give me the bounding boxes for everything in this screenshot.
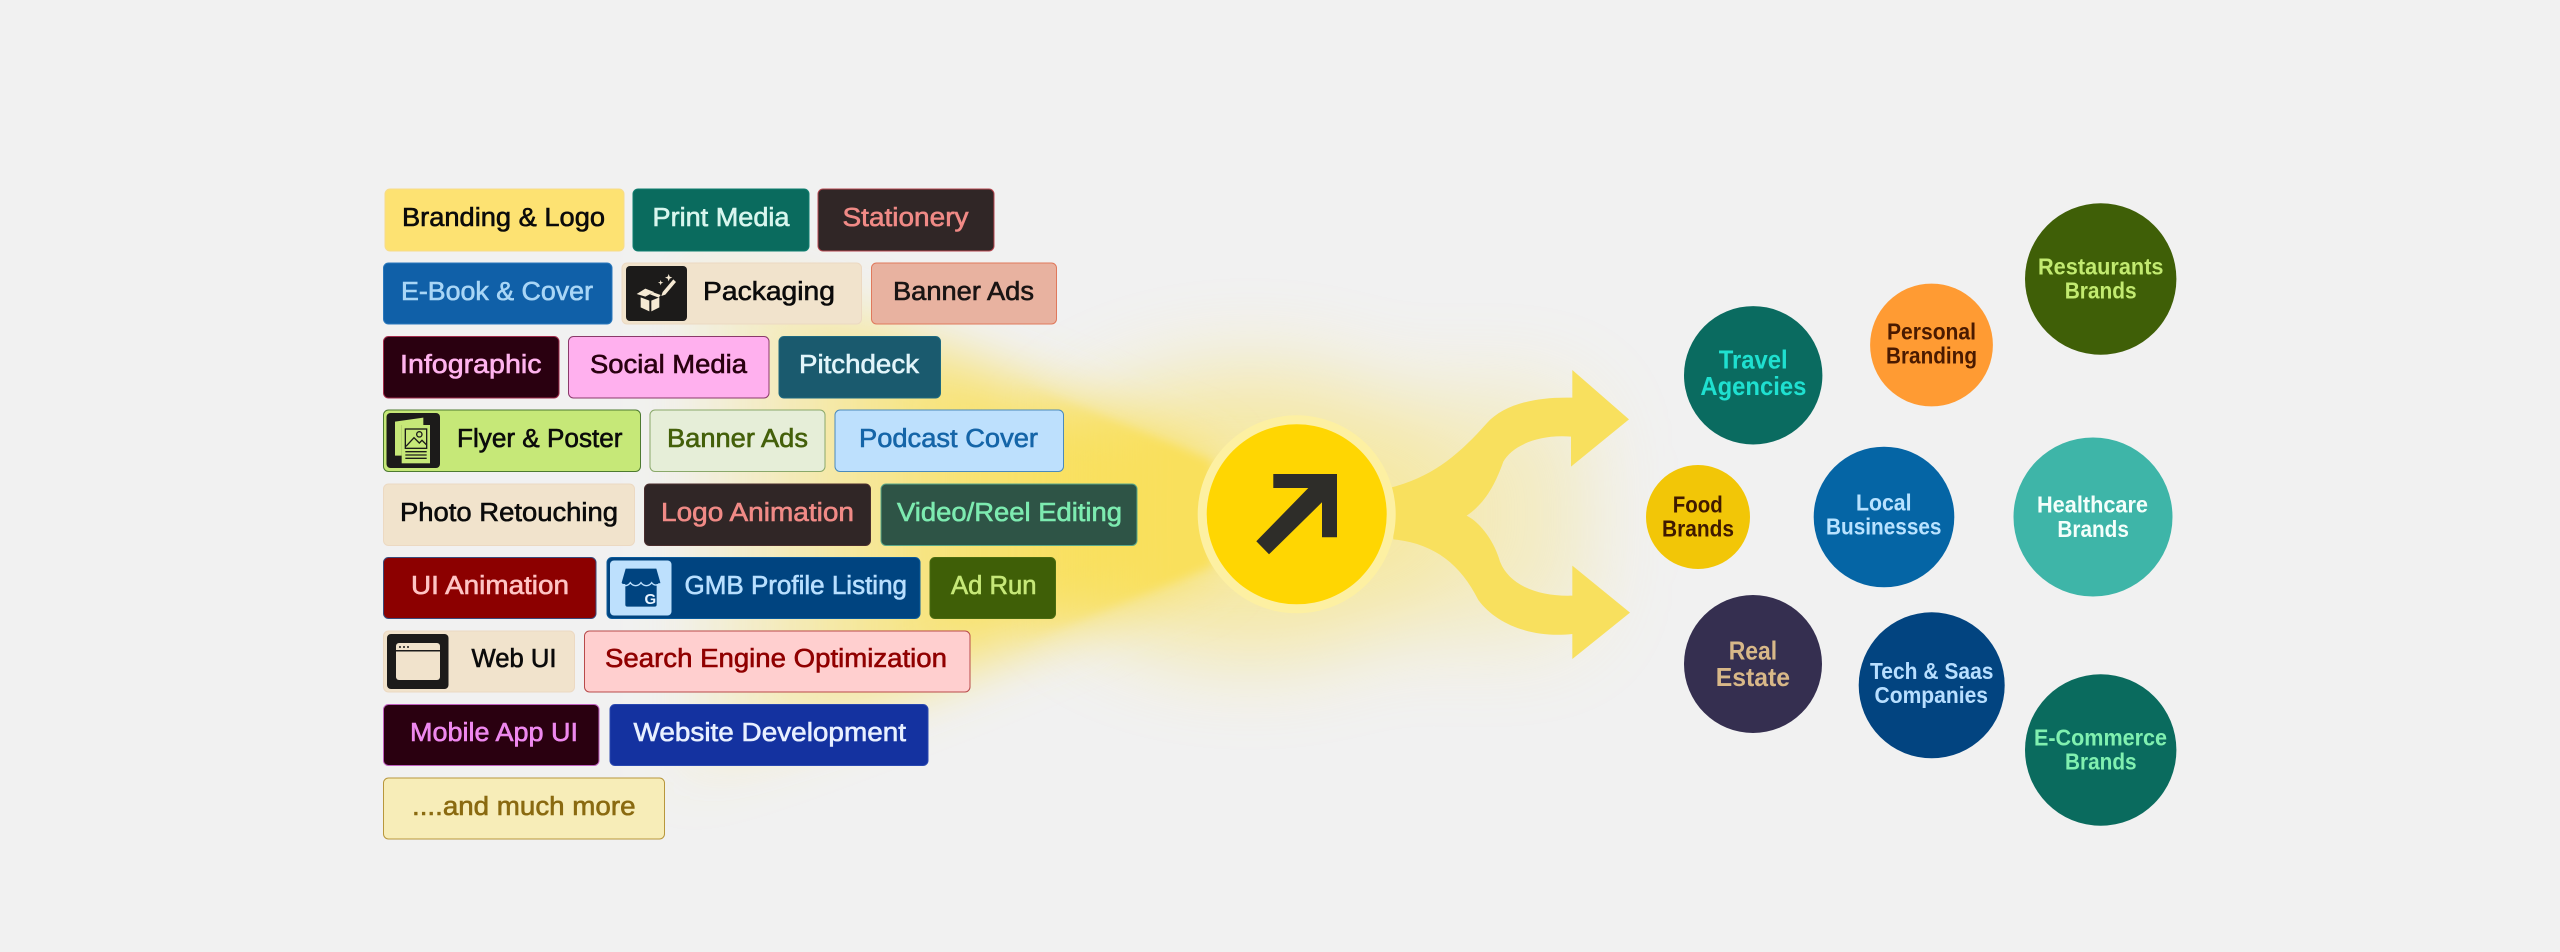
tag: Infographic: Infographic: [400, 351, 542, 379]
tag: Video/Reel Editing: [881, 484, 1137, 546]
bubble: Food Brands: Brands: [1662, 516, 1734, 542]
icon: storefront: [610, 560, 672, 616]
bubble: Food Brands: Food: [1673, 492, 1723, 518]
tag: Podcast Cover: [835, 410, 1064, 472]
tag: Website Development: [610, 704, 928, 766]
tag: Pitchdeck: [779, 336, 940, 398]
tag: Logo Animation: [644, 484, 870, 546]
tag: Social Media: Social Media: [590, 351, 748, 379]
bubble: Healthcare Brands: [2014, 438, 2172, 596]
glow: around output arrows: [1030, 369, 1590, 659]
bubble: E-Commerce Brands: [2025, 674, 2176, 826]
bubble: E-Commerce Brands: Brands: [2065, 748, 2137, 774]
tag: Banner Ads green: Banner Ads: [667, 425, 808, 453]
bubble: Personal Branding: [1870, 284, 1993, 406]
tag: Photo Retouching: Photo Retouching: [400, 499, 618, 527]
bubble: Healthcare Brands: Brands: [2057, 516, 2129, 542]
bubble: Travel Agencies: Travel: [1719, 344, 1788, 374]
tag: Photo Retouching: [384, 484, 634, 546]
tag: Branding & Logo: Branding & Logo: [402, 204, 605, 232]
tag: Branding & Logo: [385, 189, 624, 251]
tag: Mobile App UI: Mobile App UI: [410, 719, 578, 747]
bubble: Restaurants Brands: [2025, 203, 2176, 355]
tag: Flyer & Poster: Flyer & Poster: [457, 425, 623, 453]
glow: funnel: [660, 235, 1212, 795]
panel: services tags: [384, 189, 1137, 839]
icon: box with pen: [626, 266, 687, 321]
icon: up-right arrow: [1256, 474, 1337, 554]
tag: Pitchdeck: Pitchdeck: [799, 351, 919, 379]
tag: Print Media: Print Media: [652, 204, 790, 232]
tag: GMB Profile Listing: [607, 558, 920, 618]
bubble: Personal Branding: Branding: [1886, 342, 1977, 368]
tag: Banner Ads green: [650, 410, 825, 472]
bubble: Tech & Saas Companies: Companies: [1874, 682, 1988, 708]
icon: browser window: [387, 634, 448, 689]
bubble: Travel Agencies: [1684, 306, 1822, 444]
tag: Website Development: Website Development: [634, 719, 906, 747]
tag: E-Book & Cover: E-Book & Cover: [401, 278, 594, 306]
tag: Search Engine Optimization: Search Engine Optimization: [605, 645, 947, 673]
tag: Social Media: [568, 336, 769, 398]
bubble: Local Businesses: Local: [1856, 490, 1912, 516]
bubble: Tech & Saas Companies: Tech & Saas: [1870, 658, 1994, 684]
tag: Web UI: [384, 631, 574, 692]
icon: flyer: [386, 413, 440, 468]
icon: storefront: G: [644, 591, 656, 608]
tag: Packaging: [622, 263, 862, 324]
tag: Logo Animation: Logo Animation: [661, 499, 854, 527]
bubble: Local Businesses: [1814, 447, 1954, 587]
tag: Packaging: Packaging: [703, 278, 835, 306]
tag: E-Book & Cover: [384, 263, 612, 324]
tag: Flyer & Poster: [384, 410, 640, 472]
tag: Search Engine Optimization: [584, 631, 970, 692]
arrows: split output arrow: [1392, 370, 1630, 659]
tag: Video/Reel Editing: Video/Reel Editing: [897, 499, 1122, 527]
bubble: Healthcare Brands: Healthcare: [2037, 492, 2148, 518]
tag: Print Media: [633, 189, 809, 251]
tag: Podcast Cover: Podcast Cover: [859, 425, 1039, 453]
bubble: Real Estate: [1684, 595, 1822, 733]
tag: and much more: [384, 778, 664, 839]
bubble: Personal Branding: Personal: [1887, 318, 1976, 344]
tag: Web UI: Web UI: [472, 645, 556, 673]
tag: Banner Ads: Banner Ads: [893, 278, 1034, 306]
bubble: Local Businesses: Businesses: [1826, 514, 1942, 540]
bubble: Restaurants Brands: Restaurants: [2038, 254, 2164, 280]
panel: industries bubbles: [1646, 203, 2176, 826]
bubble: Tech & Saas Companies: [1859, 612, 2005, 758]
tag: Mobile App UI: [384, 704, 599, 766]
bubble: Food Brands: [1646, 465, 1750, 569]
tag: GMB Profile Listing: GMB Profile Listing: [684, 572, 907, 600]
tag: Stationery: Stationery: [842, 204, 969, 232]
tag: UI Animation: UI Animation: [411, 572, 569, 600]
tag: UI Animation: [384, 558, 596, 618]
tag: Infographic: [384, 336, 559, 398]
bubble: Real Estate: Estate: [1716, 662, 1790, 692]
tag: and much more: ....and much more: [412, 793, 636, 821]
tag: Stationery: [818, 189, 994, 251]
bubble: E-Commerce Brands: E-Commerce: [2034, 724, 2167, 750]
bubble: Restaurants Brands: Brands: [2065, 278, 2137, 304]
bubble: Travel Agencies: Agencies: [1700, 371, 1806, 401]
hub: central circle: [1198, 415, 1396, 613]
bubble: Real Estate: Real: [1729, 635, 1777, 665]
tag: Ad Run: [930, 558, 1056, 618]
tag: Banner Ads: [872, 263, 1056, 324]
tag: Ad Run: Ad Run: [951, 572, 1036, 600]
